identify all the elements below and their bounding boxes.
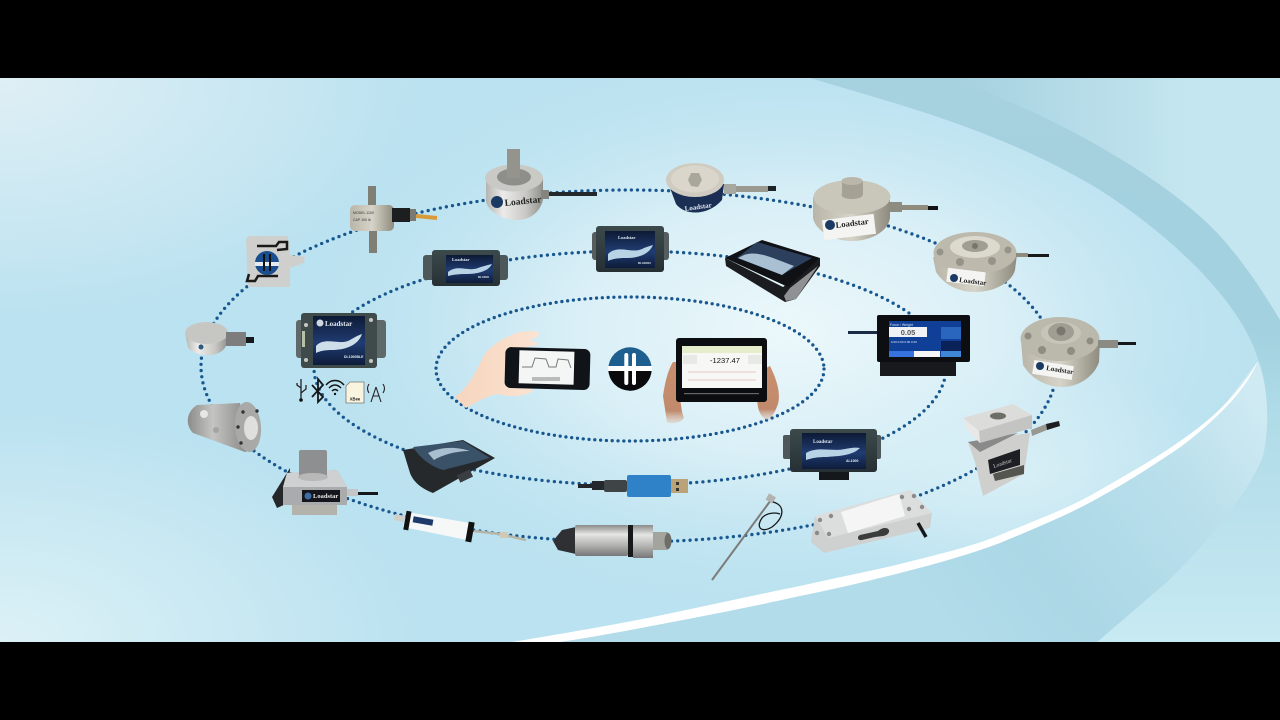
device: temperature probe <box>712 493 782 580</box>
device: touch panel display: Force / Weight <box>890 323 913 327</box>
device: DI-100U wireless box: Loadstar <box>452 257 470 262</box>
dotted orbit: outer ring <box>201 190 1057 542</box>
icon: hands holding tablet: -1237.47 <box>710 356 740 365</box>
device: USB interface box: Loadstar <box>618 235 636 240</box>
device: tension load cell with orange cable: MODEL 1100 <box>353 211 374 215</box>
device: touch panel display <box>848 315 970 376</box>
bottom letterbox bar <box>0 642 1280 720</box>
top right light sweep <box>950 78 1280 320</box>
icon: hands holding tablet <box>663 338 779 423</box>
device: small cylindrical load cell <box>185 322 254 355</box>
device: tension load cell with orange cable: CAP 100 lb <box>353 218 371 222</box>
device: AI-1000 analog box: Loadstar <box>813 440 833 445</box>
device: USB load cell interface <box>578 475 688 497</box>
icon row: USB, Bluetooth, WiFi, XBee, cellular <box>297 379 384 403</box>
device: pancake load cell: Loadstar <box>959 276 987 287</box>
icon row: USB, Bluetooth, WiFi, XBee, cellular: XBee <box>350 396 361 402</box>
device: USB interface box <box>592 226 669 272</box>
device: DI-1000BLE wireless interface: DI-1000BLE <box>344 355 364 359</box>
device: dark data acquisition unit <box>403 440 495 493</box>
device: large compression load cell: Loadstar <box>835 216 869 230</box>
device: DI-100U wireless box: DI-100U <box>478 275 489 279</box>
device: button load cell with threaded stud <box>485 149 597 220</box>
device: inline load cell with grey cylinder <box>272 450 378 515</box>
device: silver tube adapter <box>188 401 263 453</box>
device: handheld data logger <box>725 240 820 302</box>
device: compression load cell with blue label <box>666 163 776 213</box>
device: DI-1000BLE wireless interface <box>296 313 386 368</box>
device: linear position sensor <box>394 511 526 542</box>
device: pancake load cell <box>933 232 1049 292</box>
device: pancake load cell with cable <box>1020 317 1136 387</box>
device: button load cell with threaded stud: Loadstar <box>504 195 543 209</box>
bottom right swoosh <box>540 361 1267 642</box>
device: S-beam load cell <box>963 404 1060 496</box>
white swoosh stroke <box>512 361 1258 642</box>
device: large compression load cell <box>813 177 938 241</box>
dotted orbit: middle ring <box>314 251 946 485</box>
device: touch panel display: 0.00 0.00 0.00 0.00 <box>891 340 917 344</box>
top letterbox bar <box>0 0 1280 78</box>
device: pancake load cell with cable: Loadstar <box>1046 364 1074 376</box>
dotted orbit: inner ring <box>436 297 824 441</box>
device: tension load cell with orange cable <box>350 186 437 253</box>
top right swoosh <box>810 78 1280 642</box>
background panel <box>0 78 1280 642</box>
device: touch panel display: 0.05 <box>901 328 915 337</box>
icon: Loadstar logo <box>608 347 652 391</box>
device: single point beam load cell <box>811 490 932 553</box>
device: square S-type sensor with logo <box>246 236 305 287</box>
device: DI-100U wireless box <box>423 250 508 286</box>
icon: hand holding phone <box>455 331 591 408</box>
device: compression load cell with blue label: Loadstar <box>684 201 712 213</box>
device: AI-1000 analog box: AI-1000 <box>846 459 859 463</box>
device: USB interface box: DI-1000U <box>638 261 651 265</box>
device: inline load cell with grey cylinder: Loadstar <box>313 493 338 500</box>
device: DI-1000BLE wireless interface: Loadstar <box>325 320 352 328</box>
device: pressure transducer <box>553 525 672 558</box>
device: AI-1000 analog box <box>783 429 881 480</box>
device: S-beam load cell: Loadstar <box>993 458 1013 470</box>
